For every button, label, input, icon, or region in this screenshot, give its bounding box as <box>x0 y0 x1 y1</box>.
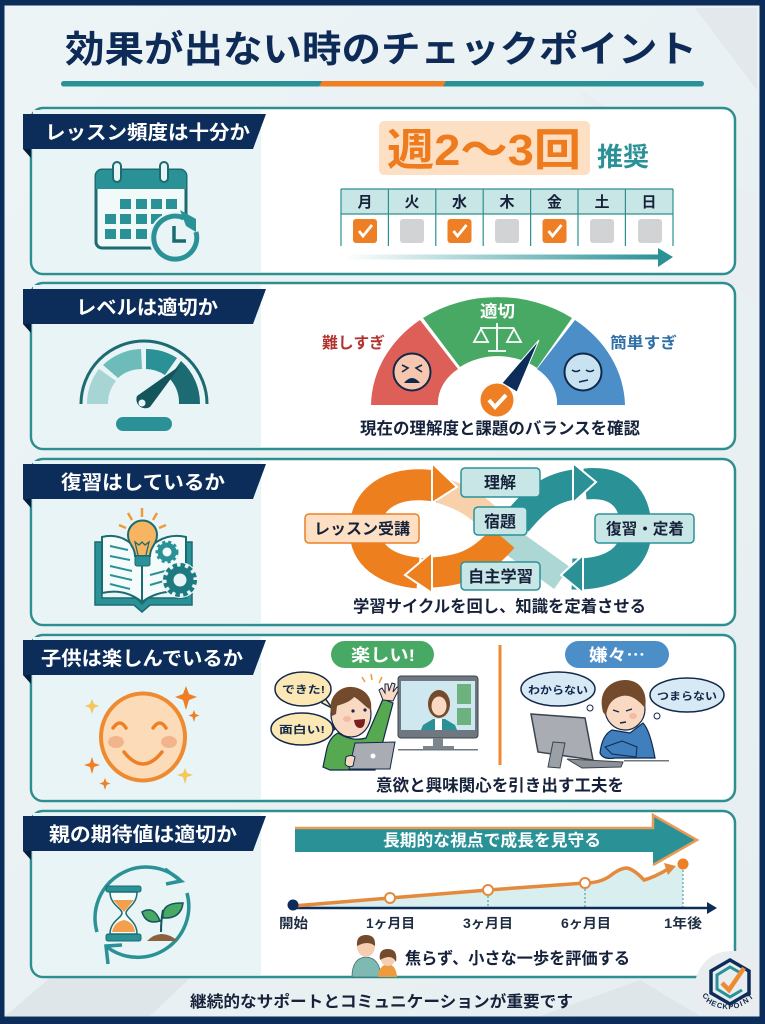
icon: orange check <box>480 384 514 416</box>
heading ribbon: review <box>23 464 266 508</box>
icon: speedometer <box>81 341 207 431</box>
footer message: 継続的なサポートとコミュニケーションが重要です <box>190 992 573 1011</box>
pill: reluctant: 嫌々… <box>589 641 645 666</box>
checkpoint logo: I <box>738 999 744 1008</box>
difficulty gauge <box>322 297 677 416</box>
checkpoint logo: K <box>722 1002 729 1011</box>
node: self study <box>461 562 540 590</box>
heading ribbon: level <box>23 289 266 333</box>
speech bubble: boring <box>650 678 724 719</box>
speech bubble: boring: つまらない <box>657 690 717 702</box>
pill: reluctant <box>565 641 669 668</box>
weekly schedule table: 日 <box>641 194 657 211</box>
speech bubble: I did it: できた! <box>282 684 325 696</box>
heading ribbon: lesson frequency <box>23 114 266 158</box>
illustration: bored child at computer <box>531 680 669 768</box>
weekly schedule table: 木 <box>499 194 515 211</box>
arrow banner: long-term view <box>295 815 697 865</box>
illustration: happy child with tablet <box>323 674 399 770</box>
checkpoint logo: T <box>746 992 755 1002</box>
panel: parent expectations <box>23 811 735 977</box>
node: lesson attendance <box>305 514 419 543</box>
gauge needle <box>502 340 539 392</box>
caption: level: 現在の理解度と課題のバランスを確認 <box>360 419 640 438</box>
speech bubble: interesting: 面白い! <box>279 723 325 736</box>
icon: calendar with clock <box>96 162 201 264</box>
speech bubble: interesting <box>271 713 335 745</box>
weekly schedule table <box>341 189 673 246</box>
checkpoint logo: C <box>716 1001 724 1011</box>
label: too hard: 難しすぎ <box>322 333 385 352</box>
growth timeline chart: 1ヶ月目 <box>366 916 415 931</box>
arrow banner: long-term view: 長期的な視点で成長を見守る <box>383 830 601 850</box>
label: appropriate: 適切 <box>480 302 515 321</box>
checkpoint logo: E <box>710 999 718 1009</box>
pill: fun <box>331 641 434 668</box>
icon: stressed face <box>394 354 430 390</box>
caption: review: 学習サイクルを回し、知識を定着させる <box>353 596 646 616</box>
caption: child enjoyment: 意欲と興味関心を引き出す工夫を <box>376 776 624 795</box>
growth timeline chart: 開始 <box>279 915 309 931</box>
checkpoint logo <box>696 951 759 1016</box>
checkpoint logo: C <box>701 991 711 1002</box>
arrow: weekly progress <box>345 248 673 267</box>
label: too easy: 簡単すぎ <box>610 333 677 352</box>
growth timeline chart: 3ヶ月目 <box>463 916 513 931</box>
icon: hourglass and sprout in cycle <box>95 867 189 964</box>
speech bubble: don't understand <box>521 672 595 711</box>
heading ribbon: level: レベルは適切か <box>76 297 219 319</box>
growth timeline chart <box>279 858 717 931</box>
learning cycle diagram <box>305 463 694 593</box>
icon: smiling face with sparkles <box>84 686 200 790</box>
heading ribbon: child enjoyment: 子供は楽しんでいるか <box>41 648 244 670</box>
checkpoint logo: H <box>705 996 714 1006</box>
icon: scales <box>474 323 521 351</box>
weekly schedule table: 土 <box>594 194 610 211</box>
panel: review <box>23 459 735 625</box>
growth timeline chart: 6ヶ月目 <box>561 916 611 931</box>
checkpoint logo: N <box>741 996 750 1006</box>
weekly schedule table: 火 <box>404 194 420 211</box>
recommended frequency badge: 週2〜3回 <box>387 126 581 175</box>
node: understanding: 理解 <box>484 474 516 492</box>
divider <box>498 645 502 765</box>
weekly schedule table: 水 <box>452 194 467 211</box>
caption: small steps: 焦らず、小さな一歩を評価する <box>405 949 630 968</box>
node: homework: 宿題 <box>484 513 516 531</box>
speech bubble: I did it <box>275 672 332 708</box>
illustration: video call monitor <box>398 676 478 750</box>
heading ribbon: parent expectations <box>23 816 266 860</box>
panel: lesson frequency <box>23 108 735 274</box>
checkpoint logo: O <box>733 1001 740 1011</box>
weekly schedule table: 月 <box>357 194 373 211</box>
title underline <box>61 81 704 86</box>
pill: fun: 楽しい! <box>351 646 415 665</box>
node: understanding <box>461 468 540 497</box>
node: self study: 自主学習 <box>468 567 533 586</box>
heading ribbon: parent expectations: 親の期待値は適切か <box>49 824 238 846</box>
growth timeline chart: 1年後 <box>664 915 703 931</box>
title: 効果が出ない時のチェックポイント <box>65 29 697 70</box>
weekly schedule table: 金 <box>547 193 562 211</box>
node: review and retention <box>595 514 694 543</box>
node: homework <box>474 507 527 535</box>
heading ribbon: lesson frequency: レッスン頻度は十分か <box>45 122 251 144</box>
node: lesson attendance: レッスン受講 <box>314 519 411 538</box>
node: review and retention: 復習・定着 <box>606 519 684 538</box>
panel: level <box>23 283 735 449</box>
heading ribbon: child enjoyment <box>23 640 266 684</box>
panel: child enjoyment <box>23 635 735 801</box>
icon: bored face <box>564 354 602 390</box>
heading ribbon: review: 復習はしているか <box>61 472 226 494</box>
recommended label: 推奨 <box>597 142 649 172</box>
checkpoint logo: P <box>728 1002 734 1011</box>
icon: parent and child <box>352 935 397 977</box>
speech bubble: don't understand: わからない <box>528 684 588 696</box>
icon: book with bulb and gears <box>95 508 198 612</box>
